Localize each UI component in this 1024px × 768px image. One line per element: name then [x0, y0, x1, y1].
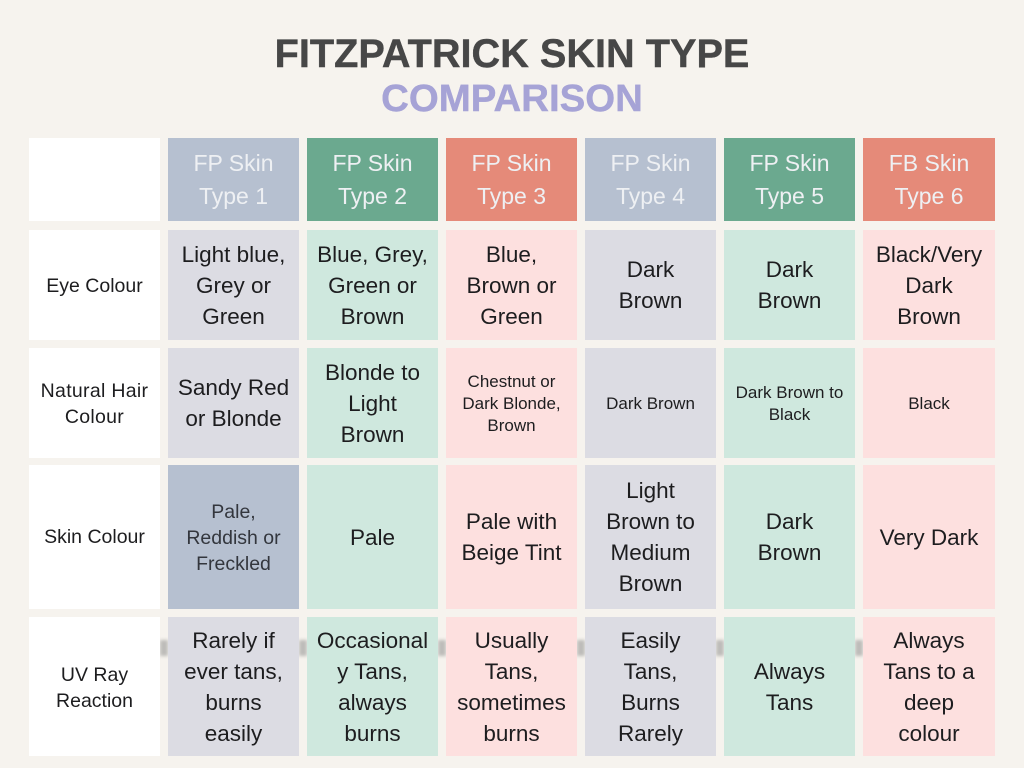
- UV reaction: type 5: Tans: [766, 690, 813, 714]
- eye colour: type 4: Dark: [627, 257, 674, 282]
- hair colour: type 2: [307, 348, 438, 458]
- header: type 4: [585, 138, 716, 221]
- eye colour: type 2: [307, 230, 438, 340]
- skin colour: type 4: [585, 465, 716, 609]
- eye colour: type 2: Green or: [328, 272, 417, 298]
- header: type 3: Type 3: [477, 183, 546, 209]
- header: type 2: [307, 138, 438, 221]
- UV reaction: type 6: Tans to a: [883, 658, 975, 684]
- eye colour: type 5: Brown: [758, 288, 821, 313]
- skin colour: type 6: [863, 465, 995, 609]
- UV reaction: type 4: Rarely: [618, 720, 683, 746]
- UV reaction: type 6: deep: [904, 690, 954, 714]
- UV reaction: type 2: y Tans,: [337, 658, 408, 684]
- connector mark 6: [855, 640, 863, 656]
- UV reaction: type 2: burns: [344, 720, 401, 746]
- hair colour: type 3: Chestnut or: [468, 372, 555, 391]
- UV reaction: type 2: [307, 617, 438, 756]
- hair colour: type 1: Sandy Red: [178, 375, 289, 400]
- eye colour: type 1: Light blue,: [182, 242, 285, 266]
- UV reaction: type 4: Easily: [620, 628, 681, 652]
- hair colour: type 4: Dark Brown: [606, 394, 695, 413]
- eye colour: type 6: Brown: [897, 304, 961, 328]
- hair colour: type 5: Dark Brown to: [736, 383, 843, 402]
- eye colour: type 6: [863, 230, 995, 340]
- UV reaction: type 3: [446, 617, 577, 756]
- eye colour: type 5: Dark: [766, 257, 813, 282]
- connector mark 4: [577, 640, 585, 656]
- hair colour: type 4: [585, 348, 716, 458]
- UV reaction: type 1: Rarely if: [192, 628, 275, 652]
- eye colour: type 2: Blue, Grey,: [317, 242, 428, 266]
- hair colour: type 2: Blonde to: [325, 360, 420, 384]
- header: type 4: Type 4: [616, 183, 685, 209]
- skin colour: type 5: Brown: [758, 540, 821, 565]
- UV reaction: type 5: Always: [754, 658, 825, 684]
- hair colour: type 1: [168, 348, 299, 458]
- header: type 1: Type 1: [199, 183, 268, 209]
- header: type 6: FB Skin: [889, 150, 969, 176]
- header: type 1: [168, 138, 299, 221]
- UV reaction: type 2: Occasional: [317, 628, 428, 652]
- hair colour: type 1: or Blonde: [185, 406, 282, 431]
- UV reaction: type 3: Tans,: [485, 658, 538, 684]
- skin colour: type 4: Light: [626, 478, 675, 503]
- eye colour: type 4: [585, 230, 716, 340]
- hair colour: type 5: Black: [769, 405, 810, 424]
- connector mark 5: [716, 640, 724, 656]
- UV reaction: type 3: Usually: [475, 628, 548, 652]
- skin colour: type 2: Pale: [350, 524, 395, 550]
- hair colour: type 5: [724, 348, 855, 458]
- UV reaction: type 2: always: [338, 690, 407, 714]
- skin colour: type 3: [446, 465, 577, 609]
- eye colour: type 1: Grey or: [196, 272, 271, 298]
- header: type 4: FP Skin: [610, 150, 691, 176]
- hair colour: type 2: Light: [348, 390, 397, 416]
- UV reaction: type 4: Burns: [621, 690, 680, 714]
- skin colour: type 5: [724, 465, 855, 609]
- hair colour: type 3: Brown: [487, 416, 536, 435]
- header: type 5: Type 5: [755, 183, 824, 209]
- subtitle: COMPARISON: [381, 77, 643, 120]
- UV reaction: type 5: [724, 617, 855, 756]
- eye colour: type 4: Brown: [619, 288, 682, 313]
- title: FITZPATRICK SKIN TYPE: [275, 32, 749, 76]
- row label: skin colour: Skin Colour: [44, 526, 145, 548]
- eye colour: type 3: [446, 230, 577, 340]
- row label: eye colour: Eye Colour: [46, 275, 143, 297]
- UV reaction: type 1: ever tans,: [184, 658, 283, 684]
- skin colour: type 4: Brown to: [606, 509, 695, 534]
- eye colour: type 1: Green: [202, 304, 265, 328]
- eye colour: type 3: Green: [480, 304, 543, 328]
- UV reaction: type 6: [863, 617, 995, 756]
- eye colour: type 6: Black/Very: [876, 242, 982, 266]
- UV reaction: type 6: colour: [898, 720, 960, 746]
- hair colour: type 3: Dark Blonde,: [462, 394, 561, 413]
- hair colour: type 6: [863, 348, 995, 458]
- UV reaction: type 6: Always: [893, 628, 965, 652]
- row label: eye colour: [29, 230, 160, 340]
- eye colour: type 6: Dark: [905, 272, 953, 298]
- row label: natural hair colour: Natural Hair: [41, 380, 148, 402]
- UV reaction: type 1: [168, 617, 299, 756]
- UV reaction: type 4: [585, 617, 716, 756]
- header: type 2: Type 2: [338, 183, 407, 209]
- row label: UV ray reaction: [29, 617, 160, 756]
- header: type 3: [446, 138, 577, 221]
- skin colour: type 1: Reddish or: [186, 527, 281, 549]
- row label: natural hair colour: Colour: [65, 406, 124, 428]
- eye colour: type 5: [724, 230, 855, 340]
- blank corner cell: [29, 138, 160, 221]
- hair colour: type 3: [446, 348, 577, 458]
- header: type 1: FP Skin: [193, 150, 274, 176]
- connector mark 2: [299, 640, 307, 656]
- row label: UV ray reaction: UV Ray: [61, 664, 128, 686]
- skin colour: type 1: Pale,: [211, 501, 256, 523]
- header: type 5: [724, 138, 855, 221]
- skin colour: type 1: [168, 465, 299, 609]
- connector mark 3: [438, 640, 446, 656]
- skin colour: type 3: Beige Tint: [461, 540, 562, 565]
- eye colour: type 2: Brown: [341, 304, 404, 328]
- skin colour: type 6: Very Dark: [880, 524, 978, 550]
- UV reaction: type 3: sometimes: [457, 690, 566, 714]
- skin colour: type 4: Brown: [619, 571, 682, 596]
- connector mark 1: [160, 640, 168, 656]
- row label: UV ray reaction: Reaction: [56, 690, 133, 712]
- UV reaction: type 4: Tans,: [624, 658, 677, 684]
- skin colour: type 3: Pale with: [466, 509, 557, 534]
- eye colour: type 1: [168, 230, 299, 340]
- UV reaction: type 1: easily: [205, 720, 262, 746]
- hair colour: type 6: Black: [908, 394, 950, 413]
- eye colour: type 3: Brown or: [466, 272, 557, 298]
- skin colour: type 2: [307, 465, 438, 609]
- eye colour: type 3: Blue,: [486, 242, 537, 266]
- header: type 3: FP Skin: [471, 150, 552, 176]
- header: type 2: FP Skin: [332, 150, 413, 176]
- skin colour: type 1: Freckled: [196, 553, 271, 575]
- header: type 6: [863, 138, 995, 221]
- skin colour: type 4: Medium: [610, 540, 690, 565]
- skin colour: type 5: Dark: [766, 509, 813, 534]
- hair colour: type 2: Brown: [341, 422, 404, 446]
- header: type 5: FP Skin: [749, 150, 830, 176]
- UV reaction: type 3: burns: [483, 720, 540, 746]
- row label: natural hair colour: [29, 348, 160, 458]
- row label: skin colour: [29, 465, 160, 609]
- header: type 6: Type 6: [894, 183, 964, 209]
- UV reaction: type 1: burns: [205, 690, 262, 714]
